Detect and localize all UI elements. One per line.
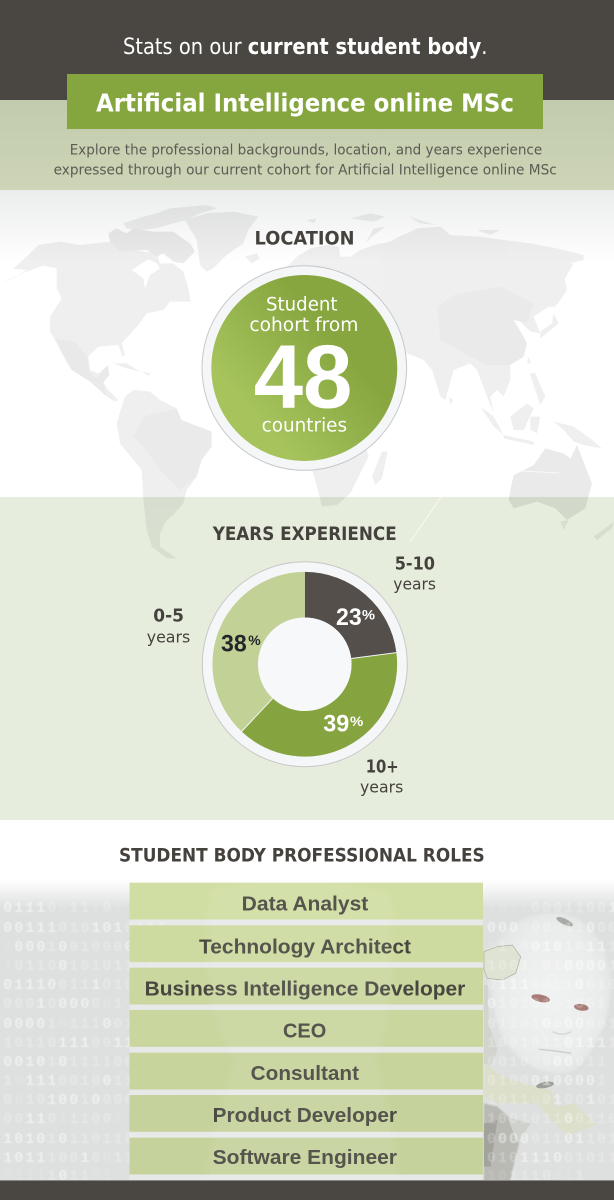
binary digit background: 0010101111001 1 <box>3 1054 168 1071</box>
location heading: LOCATION <box>254 228 354 249</box>
binary digit background: 011100111010 <box>3 977 135 994</box>
title banner: Artificial Intelligence online MSc <box>96 89 514 118</box>
role: Software Engineer: Software Engineer <box>213 1147 397 1169</box>
value: 23%: % <box>362 607 375 622</box>
roles list <box>130 883 483 1180</box>
binary digit background: 00110111001 10 <box>3 1111 157 1128</box>
panel: location background <box>0 190 614 262</box>
binary digit background: 10110010101101 <box>3 958 157 975</box>
role: Data Analyst: Data Analyst <box>242 894 369 916</box>
label: 10+ years: years <box>360 778 403 797</box>
value: 39%: % <box>350 714 363 729</box>
label: 10+ years: 10+ <box>366 756 399 777</box>
binary digit background: 0010100100000 01 <box>3 1092 179 1109</box>
faint map lines <box>410 427 559 542</box>
binary digit background: 101010110110 <box>3 1131 135 1148</box>
role: Product Developer: Product Developer <box>213 1105 397 1127</box>
role: Software Engineer <box>130 1138 483 1174</box>
world map <box>0 205 614 558</box>
label: 5-10 years <box>393 553 436 593</box>
binary digit background: 1011100100111 01 <box>3 1073 179 1090</box>
value: 38% <box>221 631 261 658</box>
binary digit background: 101110011 <box>487 1168 586 1185</box>
role: Technology Architect <box>130 925 483 962</box>
segment: 10+ years <box>242 653 397 757</box>
label: 5-10 years: years <box>393 574 436 593</box>
role: Business Intelligence Developer: Business Intelligence Developer <box>145 978 466 1000</box>
label: 10+ years <box>360 756 403 797</box>
header olive band <box>0 100 614 190</box>
years experience heading: YEARS EXPERIENCE <box>212 524 397 545</box>
label: 0-5 years <box>147 606 190 646</box>
value: 38%: 38 <box>221 631 247 658</box>
robot image <box>484 913 611 1185</box>
value: 38%: % <box>248 633 261 648</box>
footer bar <box>0 1180 614 1200</box>
header dark band <box>0 0 614 100</box>
label: 0-5 years: years <box>147 627 190 646</box>
panel: professional roles background <box>0 820 614 1180</box>
value: 23%: 23 <box>336 604 362 631</box>
binary digit background: 001110101010110 1 1 <box>3 920 212 937</box>
binary digit background: 101101110011 <box>3 1035 135 1052</box>
binary digit background <box>3 900 614 1185</box>
role: CEO: CEO <box>283 1020 326 1042</box>
segment: 5-10 years <box>305 572 396 658</box>
label: 5-10 years: 5-10 <box>395 553 435 574</box>
value: 23% <box>336 604 375 631</box>
binary digit background: 10001001000000 1 <box>3 939 179 956</box>
callout: 48 countries circle: cohort from <box>249 315 358 336</box>
role: CEO <box>130 1010 483 1047</box>
intro description: Explore the professional backgrounds, location, and years experience <box>70 142 542 158</box>
role: Business Intelligence Developer <box>130 968 483 1004</box>
callout: 48 countries circle: countries <box>262 416 347 437</box>
binary digit background: 01110011101 1 1 1 0 <box>3 900 212 917</box>
binary digit background: 01010111001 <box>487 996 608 1013</box>
callout: 48 countries circle: Student <box>266 295 338 316</box>
binary digit background: 00010000001 0 1 <box>3 996 168 1013</box>
role: Consultant <box>130 1053 483 1090</box>
role: Technology Architect: Technology Architect <box>199 936 411 958</box>
intro description: expressed through our current cohort for Artificial Intelligence online MSc <box>54 162 557 178</box>
ghost face over list <box>205 881 400 1180</box>
role: Product Developer <box>130 1095 483 1132</box>
value: 39%: 39 <box>323 711 349 738</box>
segment: 0-5 years <box>212 572 305 732</box>
binary digit background: 101110010011 1 1 <box>3 1150 179 1167</box>
binary digit background: 0111101101 <box>3 1168 113 1185</box>
binary digit background: 000010111001110 0 <box>3 1016 190 1033</box>
intro description <box>54 142 557 178</box>
intro heading: Stats on our current student body. <box>123 35 488 60</box>
heading: professional roles: STUDENT BODY PROFESSIONAL ROLES <box>119 846 485 867</box>
value: 39% <box>323 711 363 738</box>
callout: 48 countries circle <box>202 266 407 470</box>
role: Consultant: Consultant <box>251 1063 359 1085</box>
binary digit background: 00100000011 <box>487 1054 608 1071</box>
label: 0-5 years: 0-5 <box>153 606 184 627</box>
callout: 48 countries circle: 48 <box>254 327 352 427</box>
panel: years experience background <box>0 497 614 820</box>
binary digit background: 01000100001 <box>487 1073 608 1090</box>
role: Data Analyst <box>130 883 483 920</box>
donut chart <box>202 562 407 767</box>
title banner <box>67 74 543 129</box>
